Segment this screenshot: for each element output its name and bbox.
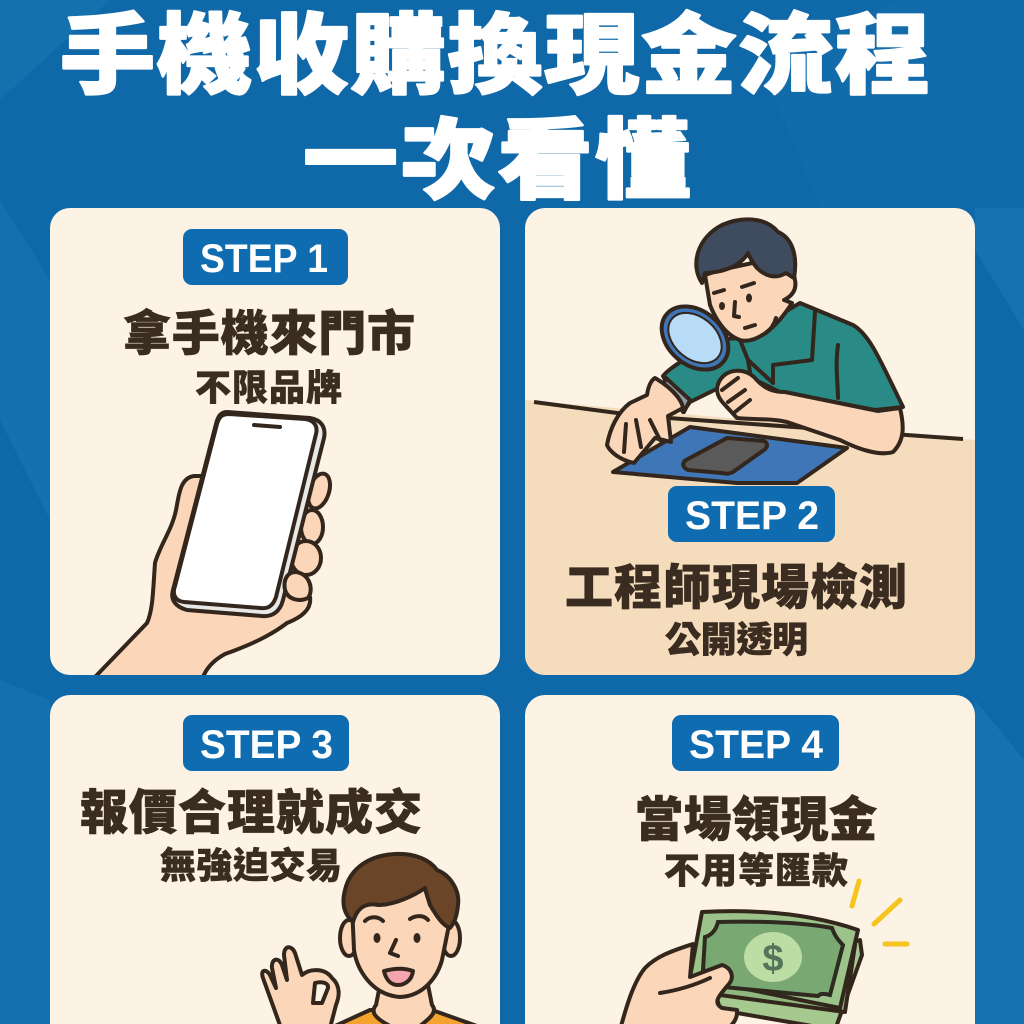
right arm and fist	[717, 371, 903, 453]
icon: hand holding cash	[620, 911, 862, 1024]
table surface	[525, 400, 975, 675]
top bill	[690, 911, 858, 1008]
facial features	[365, 916, 428, 985]
shirt	[335, 1010, 477, 1024]
OK hand	[262, 947, 339, 1024]
step 4 subheading: 不用等匯款	[664, 850, 848, 891]
shirt	[663, 303, 903, 412]
illustration: technician inspecting phone	[607, 219, 903, 483]
title	[60, 7, 930, 210]
left cuff	[660, 378, 690, 412]
title: 手機收購換現金流程	[60, 7, 930, 105]
icon: sparkle rays	[852, 881, 907, 944]
step 2 badge	[668, 486, 835, 542]
stacked bills	[715, 940, 862, 1024]
step 3 heading: 報價合理就成交	[80, 786, 422, 840]
face	[705, 262, 795, 341]
title: 一次看懂	[303, 112, 690, 210]
bill inner panel	[703, 922, 843, 996]
panel: step 2	[525, 208, 975, 675]
panel: step 4	[525, 695, 975, 1024]
hair	[343, 854, 458, 928]
magnifying glass	[649, 294, 741, 382]
face	[352, 885, 450, 997]
step 1 heading: 拿手機來門市	[123, 307, 415, 361]
left hand	[607, 378, 683, 463]
hair	[696, 219, 795, 283]
inspection mat	[613, 427, 847, 483]
table edge	[534, 402, 963, 439]
step 3 badge: STEP 3	[200, 723, 333, 767]
step 3 badge	[183, 715, 349, 771]
step 2 heading: 工程師現場檢測	[565, 561, 907, 615]
step 4 badge	[672, 715, 839, 771]
neck	[374, 985, 434, 1024]
phone on mat	[683, 438, 767, 474]
icon: hand holding phone	[95, 412, 334, 677]
center medallion	[744, 932, 802, 982]
dollar sign: $	[762, 938, 784, 980]
step 1 badge	[183, 229, 348, 285]
step 2 subheading: 公開透明	[665, 619, 808, 660]
illustration: smiling man with OK gesture	[262, 854, 477, 1024]
step 2 badge: STEP 2	[685, 494, 819, 538]
step 3 subheading: 無強迫交易	[160, 845, 342, 886]
step 4 heading: 當場領現金	[635, 794, 877, 847]
step 1 subheading: 不限品牌	[195, 367, 342, 408]
hand	[620, 944, 737, 1024]
panel: step 1	[50, 208, 500, 677]
facial features	[714, 283, 776, 333]
step 4 badge: STEP 4	[689, 723, 824, 767]
panel: step 3	[50, 695, 500, 1024]
step 1 badge: STEP 1	[200, 237, 328, 281]
ears	[340, 920, 358, 956]
